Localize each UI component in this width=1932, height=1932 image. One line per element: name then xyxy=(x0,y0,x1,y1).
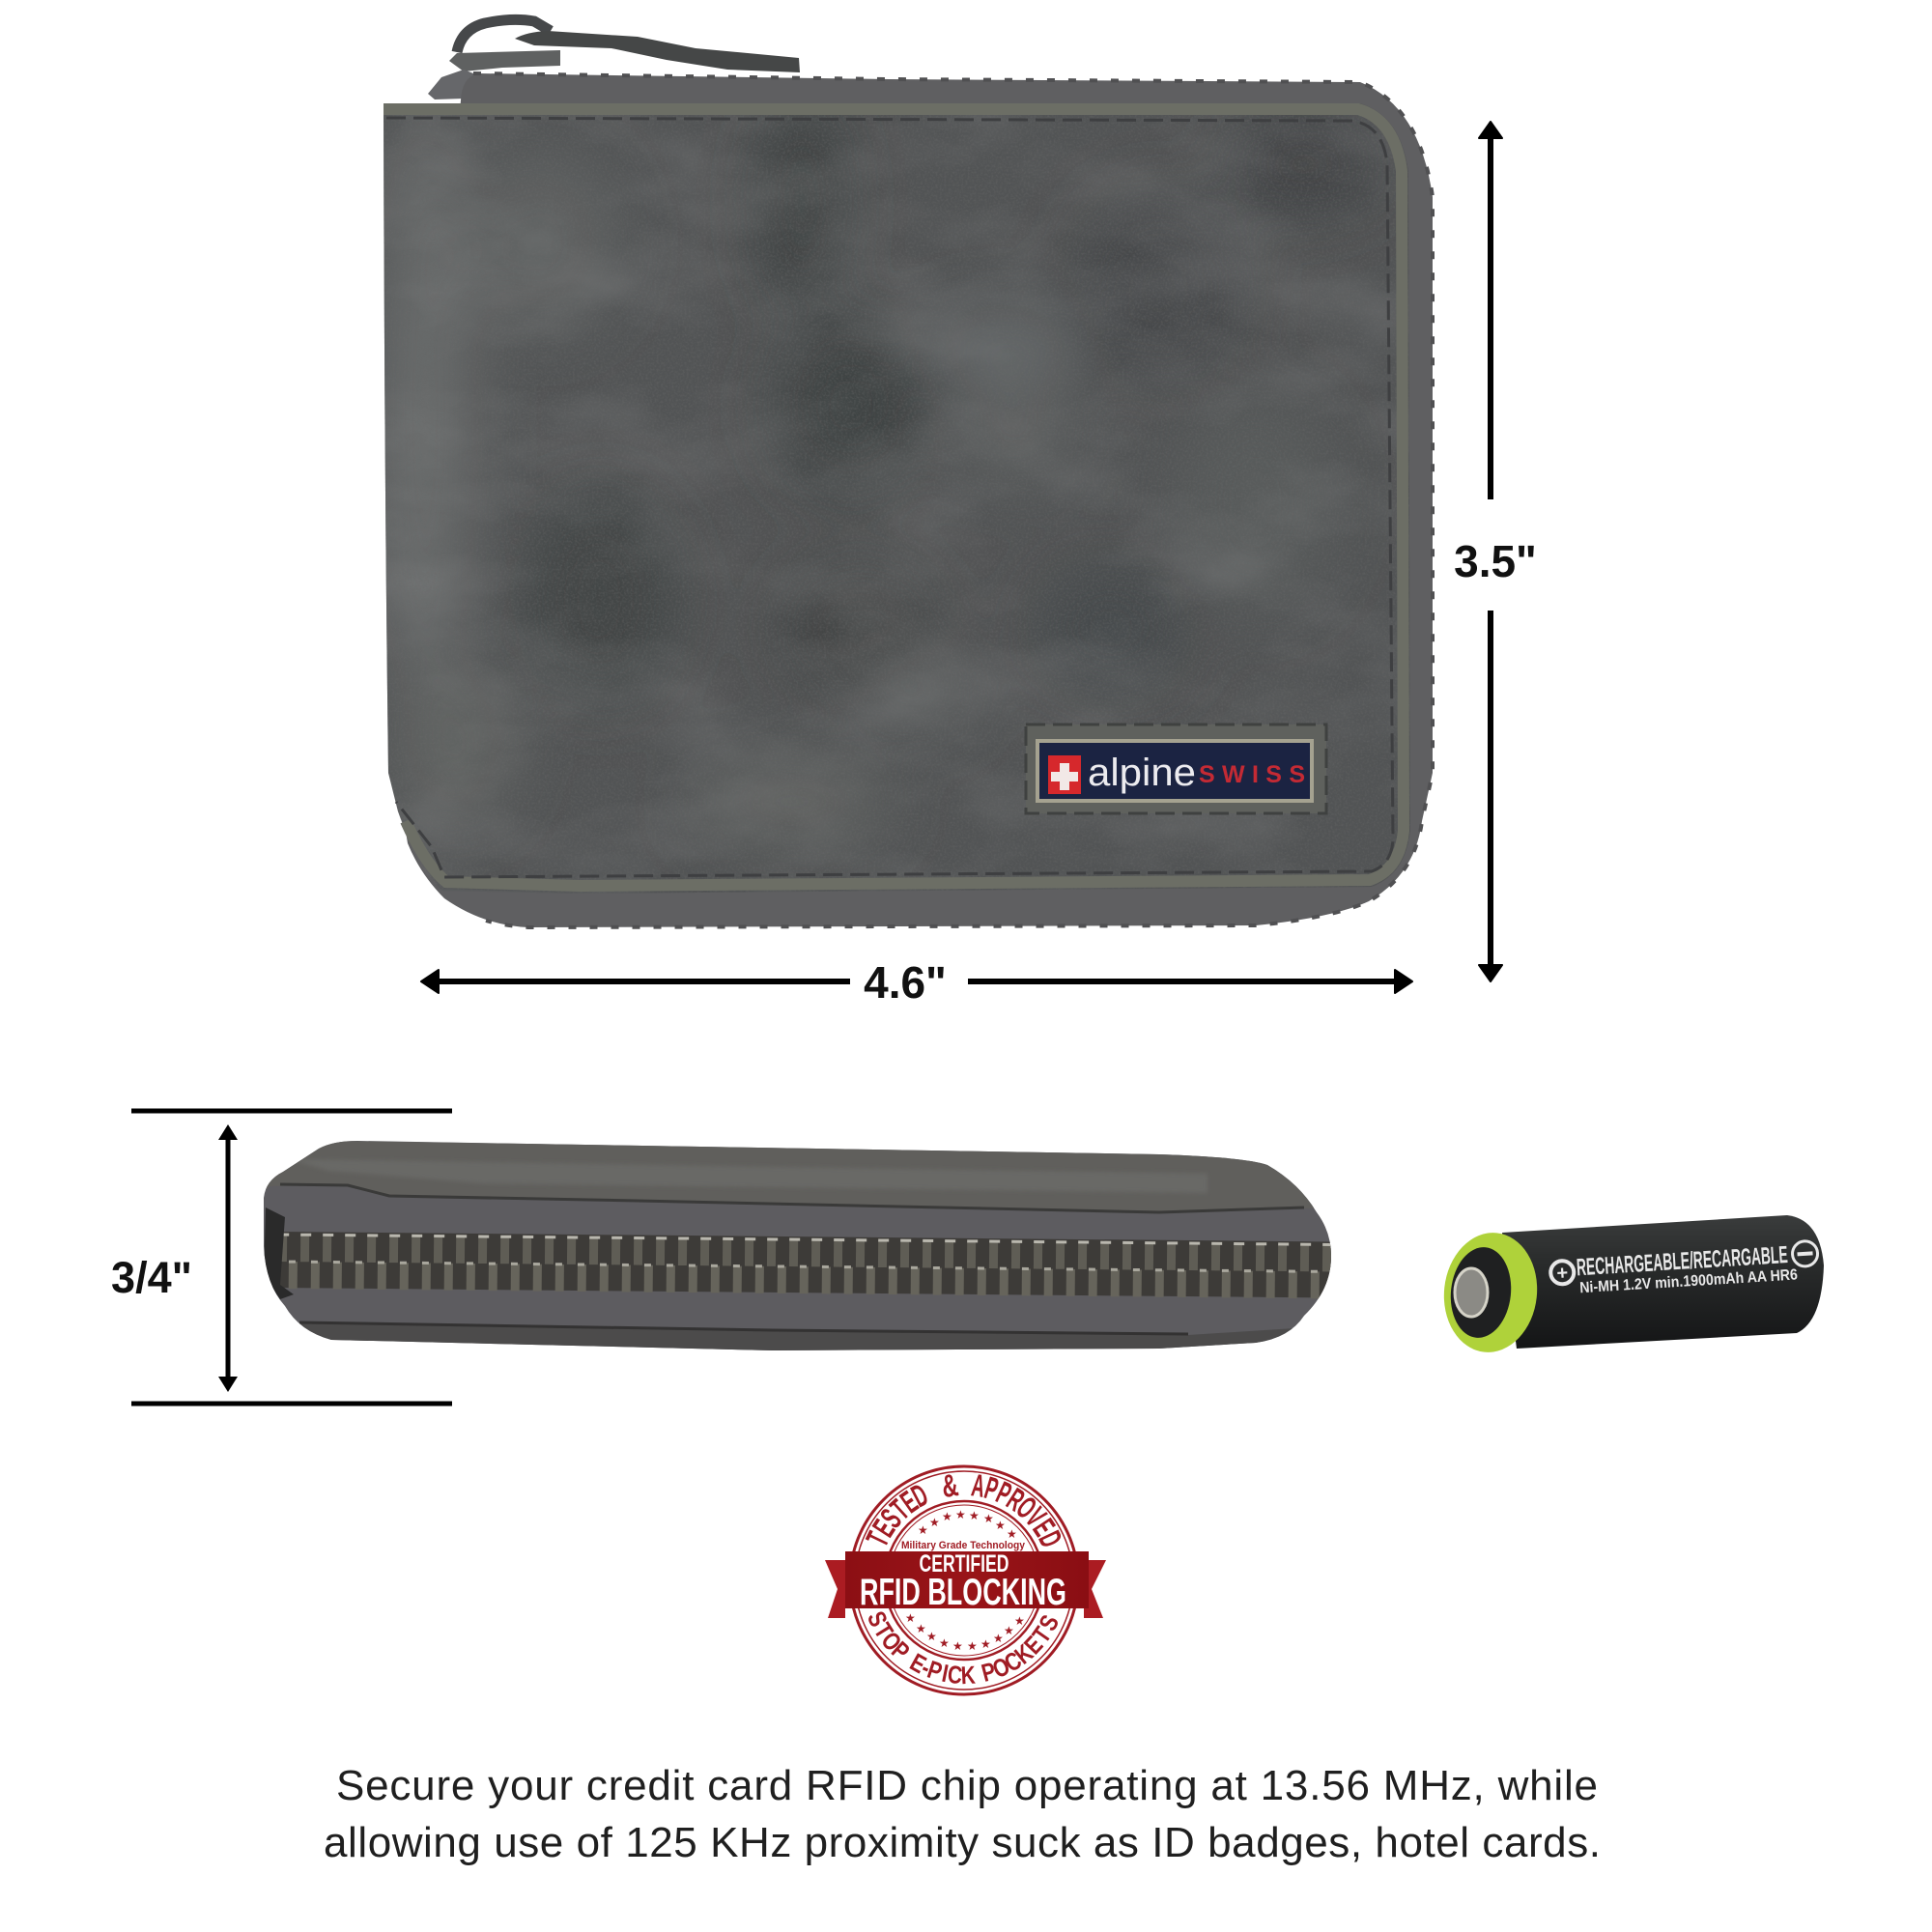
RFID blocking badge xyxy=(825,1466,1106,1694)
wallet side view xyxy=(261,1140,1331,1352)
badge ribbon xyxy=(845,1551,1089,1608)
badge bottom text xyxy=(862,1607,1065,1690)
badge bottom text: - xyxy=(918,1653,935,1682)
dimension arrow: height 3.5 in xyxy=(1454,122,1537,981)
battery green cap xyxy=(1438,1228,1543,1357)
badge bottom text: P xyxy=(887,1636,915,1665)
dimension arrow: width 4.6 in xyxy=(421,957,1412,1008)
badge top text: E xyxy=(866,1514,902,1543)
badge bottom text: K xyxy=(960,1661,976,1690)
badge rings xyxy=(850,1466,1078,1694)
caption line two: allowing use of 125 KHz proximity suck as ID badges, hotel cards. xyxy=(324,1819,1601,1866)
brand cross icon xyxy=(1048,755,1081,794)
side zipper teeth xyxy=(278,1232,1331,1297)
badge top text: & xyxy=(939,1467,960,1505)
leather mottling xyxy=(377,97,1439,908)
wallet zipper teeth xyxy=(473,73,1433,927)
side leather bottom xyxy=(290,1323,1294,1352)
badge bottom stars: ★★★★★★★★★★ xyxy=(905,1611,1025,1653)
badge bottom text: O xyxy=(988,1652,1013,1684)
badge top text xyxy=(859,1467,1069,1552)
badge bottom text: C xyxy=(947,1661,963,1690)
brand name: alpine xyxy=(1088,752,1196,794)
battery label: Ni-MH 1.2V min.1900mAh AA HR6 xyxy=(1579,1266,1798,1296)
battery terminal xyxy=(1455,1268,1488,1317)
badge bottom text: I xyxy=(940,1660,951,1688)
badge top text: D xyxy=(1032,1525,1069,1552)
label: 3/4 in: 3/4" xyxy=(111,1253,192,1302)
badge top text: E xyxy=(894,1484,924,1520)
wallet leather front xyxy=(384,103,1410,894)
caption line one: Secure your credit card RFID chip operating at 13.56 MHz, while xyxy=(336,1762,1598,1809)
badge bottom text: T xyxy=(868,1618,899,1643)
badge bottom text: E xyxy=(1019,1631,1048,1660)
badge bottom text: P xyxy=(979,1657,999,1687)
side wallet end opening xyxy=(264,1208,294,1299)
wallet zipper pull xyxy=(428,19,800,99)
wallet stitching xyxy=(386,118,1393,877)
wallet front view xyxy=(377,19,1439,927)
badge top text: T xyxy=(859,1526,896,1551)
badge top text: V xyxy=(1018,1500,1053,1533)
badge top text: T xyxy=(884,1492,916,1526)
wallet zipper tape xyxy=(396,73,1433,927)
battery label: + xyxy=(1556,1263,1569,1285)
badge top text: S xyxy=(873,1502,909,1535)
badge top stars: ★★★★★★★★ xyxy=(918,1508,1017,1541)
badge bottom text: K xyxy=(1009,1638,1038,1669)
badge ribbon line two: RFID BLOCKING xyxy=(860,1572,1066,1613)
badge top text: P xyxy=(980,1470,1003,1508)
badge top text: P xyxy=(991,1474,1017,1512)
battery xyxy=(1438,1215,1824,1357)
badge bottom text: S xyxy=(1034,1610,1065,1634)
badge top text: R xyxy=(1001,1481,1031,1519)
wallet leather edge xyxy=(384,109,1404,886)
badge bottom text: O xyxy=(876,1627,907,1657)
badge top text: O xyxy=(1009,1490,1043,1525)
badge top text: D xyxy=(906,1477,934,1515)
brand suffix: SWISS xyxy=(1199,761,1305,788)
battery body xyxy=(1502,1215,1824,1349)
caption xyxy=(324,1762,1601,1866)
battery label xyxy=(1549,1239,1819,1298)
label: 4.6 in: 4.6" xyxy=(864,957,947,1008)
badge ribbon line one: CERTIFIED xyxy=(920,1550,1009,1577)
badge bottom text: P xyxy=(924,1656,946,1686)
badge small caption: Military Grade Technology xyxy=(901,1540,1026,1551)
badge bottom text: E xyxy=(905,1648,930,1679)
badge top text: A xyxy=(969,1467,987,1504)
dimension marker: thickness 3/4 in xyxy=(111,1111,452,1404)
badge top text: E xyxy=(1026,1513,1062,1543)
wallet brand patch xyxy=(1026,724,1326,813)
side leather top xyxy=(261,1140,1328,1212)
badge bottom text: T xyxy=(1027,1621,1057,1648)
badge bottom text: S xyxy=(862,1607,893,1631)
label: 3.5 in: 3.5" xyxy=(1454,536,1537,586)
badge bottom text: C xyxy=(1000,1646,1026,1677)
badge ribbon tails xyxy=(825,1560,1106,1618)
